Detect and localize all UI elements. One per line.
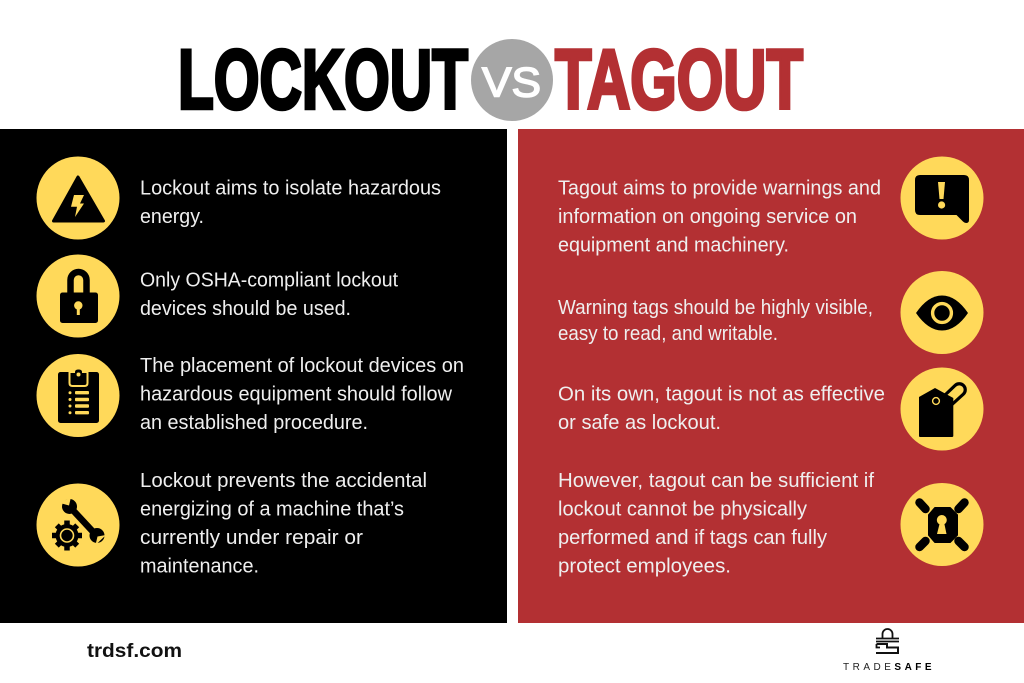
logo: tradesafe xyxy=(843,629,935,673)
icon: padlock xyxy=(36,254,120,338)
item: procedure text: The placement of lockout devices on xyxy=(140,354,464,377)
item: isolate energy text: energy. xyxy=(140,205,204,228)
item: effectiveness text xyxy=(558,382,885,434)
item: effectiveness text: or safe as lockout. xyxy=(558,411,721,434)
item: sufficient text: However, tagout can be sufficient if xyxy=(558,469,874,492)
item: warnings text xyxy=(558,176,881,256)
item: procedure text: hazardous equipment should follow xyxy=(140,382,452,406)
icon: eye xyxy=(900,271,984,354)
logo wordmark: TRADESAFE xyxy=(843,662,935,673)
item: warnings text: information on ongoing service on xyxy=(558,205,857,228)
item: sufficient text xyxy=(558,469,874,578)
item: visible tags text xyxy=(558,296,873,345)
item: procedure text xyxy=(140,354,464,434)
item: procedure text: an established procedure. xyxy=(140,411,368,434)
item: warnings text: equipment and machinery. xyxy=(558,234,789,256)
item: accidental energizing text: Lockout prevents the accidental xyxy=(140,469,427,492)
item: visible tags text: easy to read, and writable. xyxy=(558,322,778,345)
vs badge: VS xyxy=(482,58,541,106)
icon: high voltage warning xyxy=(36,156,120,240)
item: compliant devices text: devices should be used. xyxy=(140,297,351,320)
item: sufficient text: performed and if tags can fully xyxy=(558,526,828,549)
item: accidental energizing text: energizing of a machine that’s xyxy=(140,498,404,520)
item: accidental energizing text: maintenance. xyxy=(140,554,259,578)
item: compliant devices text: Only OSHA-compliant lockout xyxy=(140,269,398,292)
title word: lockout: LOCKOUT xyxy=(178,32,468,126)
item: isolate energy text: Lockout aims to isolate hazardous xyxy=(140,176,441,199)
item: accidental energizing text xyxy=(140,469,427,578)
icon: alert speech bubble xyxy=(900,156,984,240)
item: effectiveness text: On its own, tagout is not as effective xyxy=(558,382,885,406)
item: accidental energizing text: currently under repair or xyxy=(140,526,363,549)
item: isolate energy text xyxy=(140,176,441,228)
icon: tag xyxy=(900,368,984,450)
title word: tagout: TAGOUT xyxy=(555,32,803,126)
item: warnings text: Tagout aims to provide warnings and xyxy=(558,176,881,199)
item: sufficient text: protect employees. xyxy=(558,554,731,578)
item: compliant devices text xyxy=(140,269,398,320)
icon: lock with rays xyxy=(900,483,984,566)
icon: wrench and gear xyxy=(36,484,120,566)
item: visible tags text: Warning tags should be highly visible, xyxy=(558,296,873,319)
icon: procedure clipboard xyxy=(36,354,120,437)
item: sufficient text: lockout cannot be physically xyxy=(558,498,808,520)
panel: tagout xyxy=(518,129,1024,623)
logo icon: lock xyxy=(876,629,899,653)
panel: lockout xyxy=(0,129,507,623)
title xyxy=(178,32,803,126)
vs badge xyxy=(471,39,553,121)
website url: trdsf.com xyxy=(87,640,182,662)
